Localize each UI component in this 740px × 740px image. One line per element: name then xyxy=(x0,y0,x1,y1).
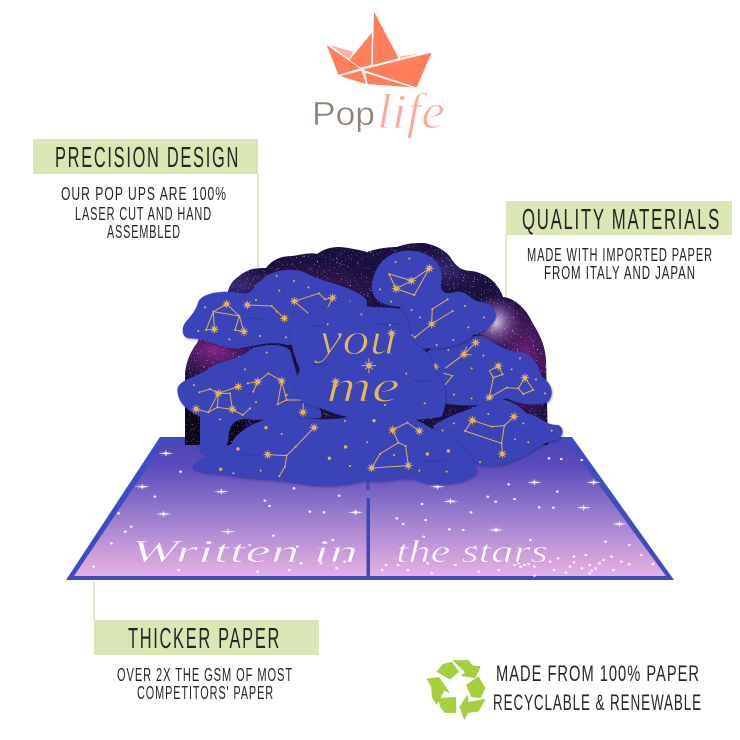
text block: made from paper xyxy=(493,661,702,715)
cloud: centre "you * me" xyxy=(288,301,445,420)
text block: precision design xyxy=(61,184,227,242)
pop-up clouds with constellations xyxy=(177,251,563,486)
text block: precision design: ASSEMBLED xyxy=(107,222,181,242)
icon: star between words xyxy=(362,358,376,373)
heading band: precision design: PRECISION DESIGN xyxy=(55,142,240,174)
lettering: you: you xyxy=(314,314,397,364)
icon: paper boat xyxy=(327,12,432,87)
card base: open card with starry gradient xyxy=(66,437,674,580)
text block: thicker paper xyxy=(117,665,293,703)
callout: precision design xyxy=(33,139,258,242)
cloud: bottom right xyxy=(433,399,563,466)
base stars xyxy=(94,450,653,576)
cloud: front bottom xyxy=(193,412,477,486)
leader lines xyxy=(94,174,506,620)
lettering: me: me xyxy=(326,362,400,412)
logo: Pop Life paper boat xyxy=(312,12,445,139)
icon: recycling arrows xyxy=(427,661,485,719)
callout: thicker paper xyxy=(94,620,319,703)
base lettering: written in the stars xyxy=(131,533,548,569)
heading band: thicker paper xyxy=(94,620,319,655)
cloud: left middle xyxy=(177,345,321,455)
text block: quality materials xyxy=(527,245,713,283)
back panel: galaxy sky xyxy=(185,243,548,445)
callout: quality materials xyxy=(506,201,732,283)
base lettering: written in the stars: the stars xyxy=(396,533,548,569)
cloud: right middle xyxy=(423,336,552,405)
heading band: precision design xyxy=(33,139,258,174)
text block: precision design: LASER CUT AND HAND xyxy=(75,204,212,224)
logo wordmark: Pop xyxy=(312,95,375,132)
base lettering: written in the stars: Written in xyxy=(131,533,358,569)
logo wordmark: life xyxy=(377,83,445,139)
pop-up card illustration xyxy=(66,240,674,580)
text block: precision design: OUR POP UPS ARE 100% xyxy=(61,184,227,204)
text block: thicker paper: COMPETITORS' PAPER xyxy=(137,683,274,703)
logo wordmark xyxy=(312,83,445,139)
text block: thicker paper: OVER 2X THE GSM OF MOST xyxy=(117,665,293,685)
cloud: top right xyxy=(372,251,496,349)
heading band: thicker paper: THICKER PAPER xyxy=(128,623,281,655)
cloud: top left with libra xyxy=(183,270,370,348)
